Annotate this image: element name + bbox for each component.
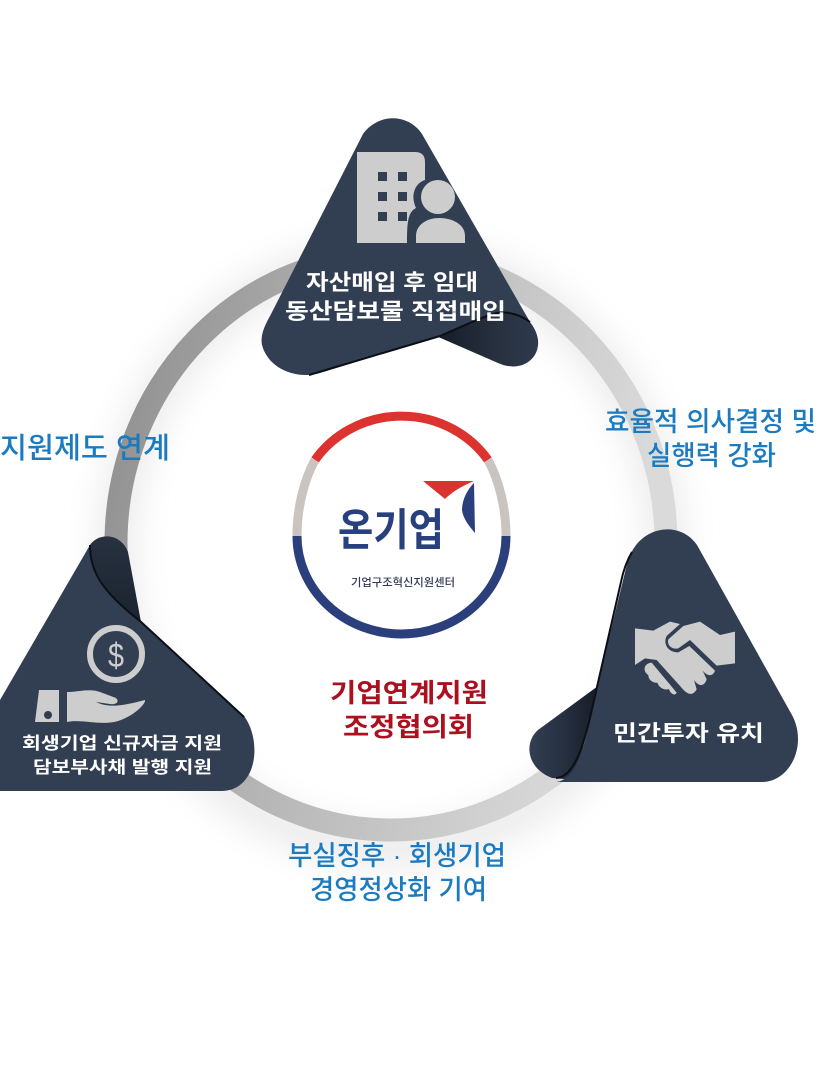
icon: coin and hand [35,628,145,723]
ring shadow [116,256,666,848]
left panel text [22,734,222,777]
panel: right triangle [529,529,798,782]
top panel text [285,270,506,324]
triangle sheet [0,545,254,791]
logo ring: blue arc [297,536,506,634]
folded corner [90,536,141,622]
triangle sheet [556,529,798,782]
icon: handshake [635,622,735,694]
logo ring: grey arc [297,460,506,536]
icon: building and person [357,152,465,243]
center title: 조정협의회 [343,712,474,742]
logo subtitle: 기업구조혁신지원센터 [351,575,455,589]
center title: 기업연계지원 [330,678,488,708]
icon: coin and hand: $ [108,637,124,675]
label: efficient decisions: 실행력 강화 [647,441,776,471]
label: efficient decisions [605,407,816,471]
center logo [297,416,506,634]
folded corner [529,686,598,780]
logo wordmark: 온기업 [338,506,444,555]
left panel text: 담보부사채 발행 지원 [33,758,212,777]
center title [330,678,488,742]
panel: left triangle [0,536,254,791]
label: normalization [288,841,506,905]
folded corner [436,305,538,366]
right panel text: 민간투자 유치 [613,721,764,746]
triangle sheet [262,118,530,375]
logo arrow mark [423,481,475,533]
label: efficient decisions: 효율적 의사결정 및 [605,407,816,437]
top panel text: 자산매입 후 임대 [306,270,478,295]
left panel text: 회생기업 신규자금 지원 [22,734,222,753]
label: normalization: 경영정상화 기여 [310,875,487,905]
logo ring: red arc [315,416,488,460]
label: normalization: 부실징후 · 회생기업 [288,841,506,871]
top panel text: 동산담보물 직접매입 [285,299,506,324]
label: support program link: 지원제도 연계 [0,432,170,465]
ring [116,256,666,830]
panel: top triangle [262,118,538,375]
